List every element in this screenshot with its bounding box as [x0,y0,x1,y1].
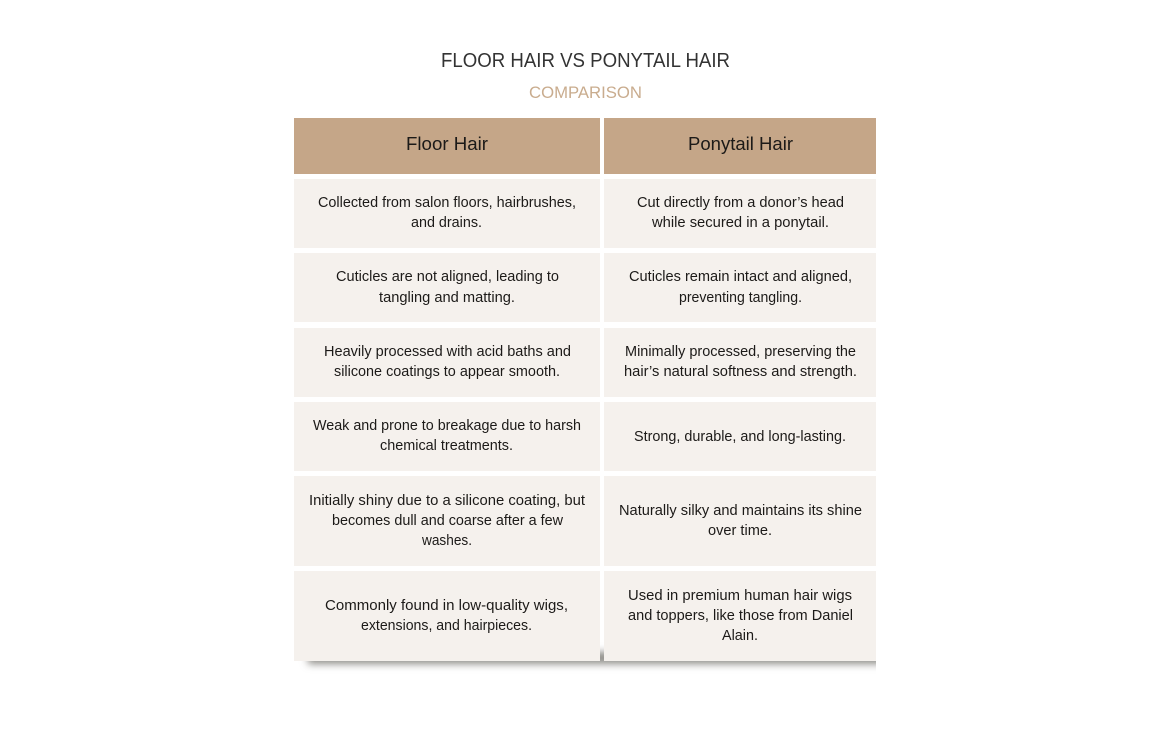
row: durability, floor hair: chemical treatments. [380,437,513,454]
row: processing, ponytail hair: Minimally processed, preserving the [625,343,856,360]
row: cuticles, ponytail hair: preventing tangling. [679,289,802,306]
row: cuticles, floor hair: Cuticles are not aligned, leading to [336,268,559,285]
row: cuticles, floor hair [294,253,600,322]
subtitle: COMPARISON [529,84,642,102]
row: durability, ponytail hair [604,402,876,471]
row: use, floor hair [294,571,600,661]
row: use, ponytail hair: Used in premium human hair wigs [628,587,852,604]
row: shine, floor hair: becomes dull and coarse after a few [332,512,563,529]
row: use, ponytail hair: and toppers, like those from Daniel [628,607,853,624]
row: cuticles, ponytail hair [604,253,876,322]
row: cuticles, floor hair: tangling and matting. [379,289,515,306]
row: shine, ponytail hair: over time. [708,522,772,539]
row: use, ponytail hair [604,571,876,661]
header: Floor Hair: Floor Hair [406,133,488,154]
row: shine, ponytail hair: Naturally silky and maintains its shine [619,502,862,519]
header: Ponytail Hair: Ponytail Hair [688,133,793,154]
row: source, floor hair [294,179,600,248]
row: source, ponytail hair: while secured in a ponytail. [651,214,829,231]
row: source, floor hair: and drains. [411,214,482,231]
row: shine, floor hair: Initially shiny due to a silicone coating, but [309,492,586,509]
row: processing, floor hair: Heavily processed with acid baths and [324,343,571,360]
column: Floor Hair [294,118,600,661]
row: processing, floor hair: silicone coatings to appear smooth. [334,363,560,380]
column: Ponytail Hair [604,118,876,661]
table shadow [308,652,898,664]
row: shine, ponytail hair [604,476,876,566]
header: Ponytail Hair [604,118,876,174]
row: shine, floor hair [294,476,600,566]
row: source, floor hair: Collected from salon floors, hairbrushes, [318,194,576,211]
title: FLOOR HAIR VS PONYTAIL HAIR [441,50,730,72]
row: durability, floor hair: Weak and prone to breakage due to harsh [313,417,581,434]
row: durability, floor hair [294,402,600,471]
row: cuticles, ponytail hair: Cuticles remain intact and aligned, [629,268,852,285]
row: durability, ponytail hair: Strong, durable, and long-lasting. [634,428,846,445]
row: processing, ponytail hair: hair’s natural softness and strength. [624,363,857,380]
row: source, ponytail hair [604,179,876,248]
row: shine, floor hair: washes. [421,532,472,549]
header: Floor Hair [294,118,600,174]
row: processing, ponytail hair [604,328,876,397]
row: source, ponytail hair: Cut directly from a donor’s head [637,194,844,211]
row: processing, floor hair [294,328,600,397]
row: use, ponytail hair: Alain. [722,627,758,644]
row: use, floor hair: extensions, and hairpieces. [361,617,532,634]
row: use, floor hair: Commonly found in low-quality wigs, [325,597,568,614]
